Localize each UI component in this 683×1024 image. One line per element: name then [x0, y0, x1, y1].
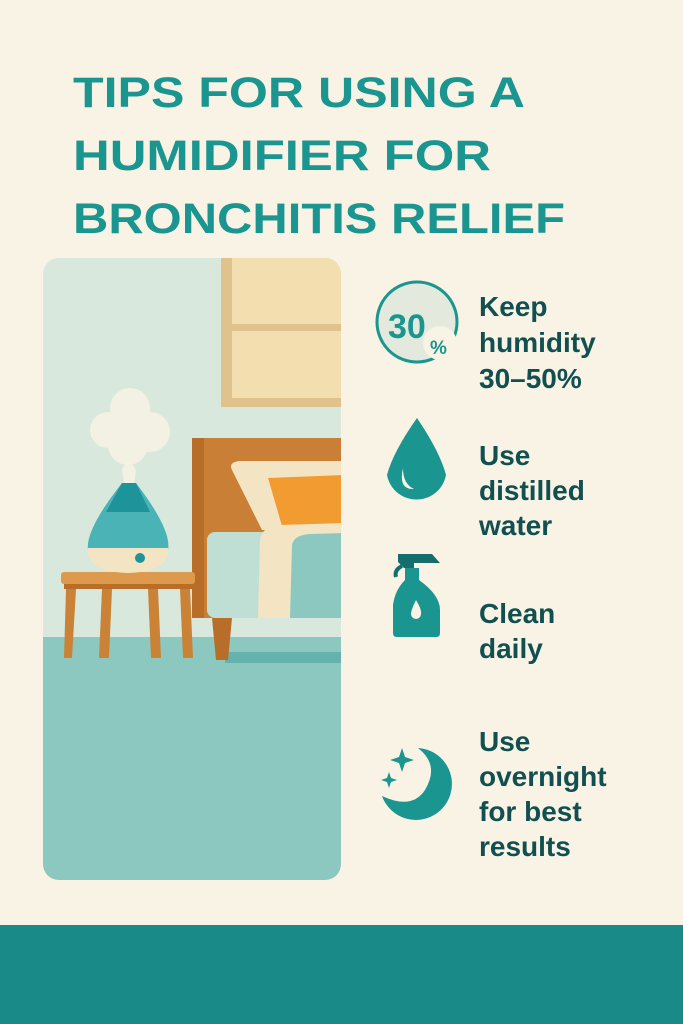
steam — [90, 388, 170, 485]
text: humidity: humidity — [479, 327, 596, 358]
title — [73, 69, 565, 243]
title: TIPS FOR USING A — [73, 69, 525, 117]
icon: moon — [381, 748, 452, 820]
icon: 30% circle — [377, 282, 457, 362]
text: humidity: 30–50% — [479, 363, 582, 394]
text: humidity: Keep — [479, 291, 547, 322]
panel: bedroom illustration — [43, 250, 352, 887]
text: clean: Clean — [479, 598, 555, 629]
table — [61, 572, 195, 658]
text: overnight: for best — [479, 796, 582, 827]
text: distilled: distilled — [479, 475, 585, 506]
floor — [43, 637, 341, 887]
text: overnight: Use — [479, 726, 530, 757]
humidifier — [88, 483, 168, 573]
icon: 30% circle: 30 — [388, 308, 426, 346]
text: overnight — [479, 726, 607, 862]
text: clean: daily — [479, 633, 543, 664]
window — [221, 258, 341, 407]
footer band — [0, 925, 683, 1024]
text: overnight: results — [479, 831, 571, 862]
bed — [192, 438, 352, 660]
icon: water drop — [387, 418, 446, 500]
text: distilled: water — [478, 510, 552, 541]
text: overnight: overnight — [479, 761, 607, 792]
icon: spray bottle — [393, 554, 440, 637]
title: BRONCHITIS RELIEF — [73, 195, 565, 243]
text: distilled: Use — [479, 440, 530, 471]
text: distilled — [478, 440, 585, 541]
text: humidity — [479, 291, 596, 394]
icon: 30% circle: % — [430, 338, 447, 359]
text: clean — [479, 598, 555, 664]
title: HUMIDIFIER FOR — [73, 132, 491, 180]
